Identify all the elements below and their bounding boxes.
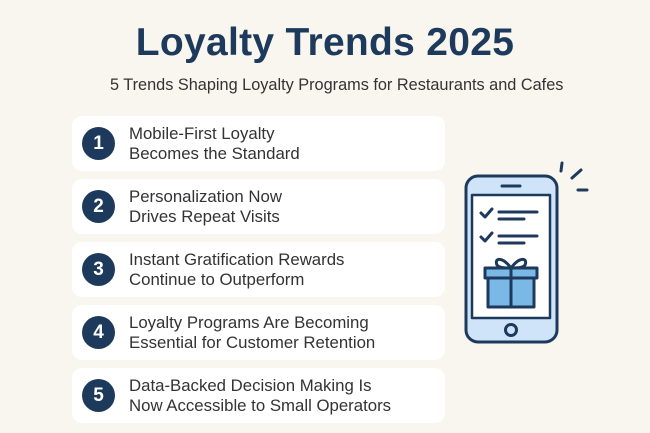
card 2: 2 — [93, 196, 104, 217]
card 4 — [72, 305, 445, 360]
card 1: 1 — [93, 133, 104, 154]
card 3 — [72, 242, 445, 297]
card 4: 4 — [93, 322, 104, 343]
title: Loyalty Trends 2025 — [136, 21, 514, 64]
card 1 — [72, 116, 445, 171]
card 3: Continue to Outperform — [129, 270, 304, 289]
card 5 — [72, 368, 445, 423]
card 5: Now Accessible to Small Operators — [129, 396, 391, 415]
card 3: Instant Gratification Rewards — [129, 250, 344, 269]
card 5: Data-Backed Decision Making Is — [129, 376, 372, 395]
card 1: Becomes the Standard — [129, 144, 300, 163]
card 5: 5 — [93, 385, 104, 406]
card 2: Personalization Now — [129, 187, 282, 206]
subtitle: 5 Trends Shaping Loyalty Programs for Restaurants and Cafes — [110, 76, 563, 94]
card 3: 3 — [93, 259, 104, 280]
card 1: Mobile-First Loyalty — [129, 124, 274, 143]
card 4: Essential for Customer Retention — [129, 333, 375, 352]
card 2 — [72, 179, 445, 234]
card 4: Loyalty Programs Are Becoming — [129, 313, 369, 332]
card 2: Drives Repeat Visits — [129, 207, 280, 226]
